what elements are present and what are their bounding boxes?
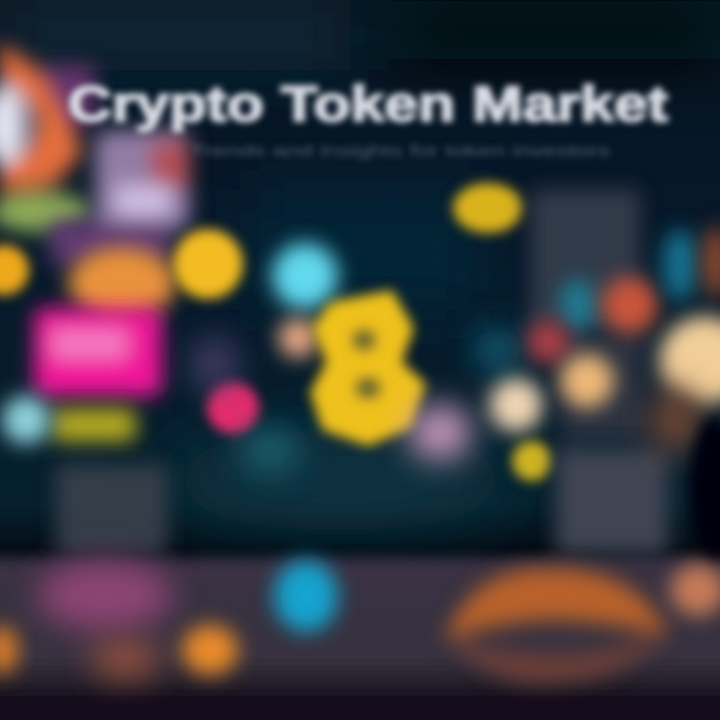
dark shadow [690,418,720,562]
icon: peach coin [278,318,318,358]
soft orange glow [91,640,159,680]
right tower [526,190,668,554]
peach coin [560,354,614,408]
left tower of coins [34,130,190,554]
grey pedestal [56,464,168,554]
cyan reflection [274,560,338,632]
orange coin stack [68,247,176,319]
floor reflections [0,559,720,683]
icon: orange ring logo [0,42,95,232]
tower lower column [560,330,645,440]
pink reflection [37,559,173,631]
orange glow [182,625,238,675]
icon: pink and teal cluster [240,328,522,472]
subtitle: Trends and insights for token investors [190,143,610,160]
right floor glow [670,564,720,616]
purple haze [191,335,239,395]
icon: yellow bitcoin symbol [310,290,426,446]
red coin [526,320,570,364]
red orange coin [602,277,658,333]
tower top [50,130,190,265]
icon: gold coin right of tower [173,229,243,299]
background glow [0,0,720,530]
brown coin [702,226,720,298]
title: Crypto Token Market [68,76,668,132]
tower base [556,448,668,554]
brown fringe [649,386,701,454]
floor band [0,558,720,720]
cream glow [659,316,720,404]
icon: yellow badge [453,183,523,233]
right edge shapes [649,226,720,562]
left orange glow [0,626,18,674]
icon: pale blue coin [2,396,50,444]
icon: magenta coin [207,382,259,434]
teal coin [560,279,596,331]
icon: pale glowing coin [489,378,543,432]
icon: cyan coin [272,243,338,309]
pink block [34,308,162,396]
yellow base label [52,408,136,442]
tower upper column [530,190,640,330]
brown orange ring reflection [445,568,668,683]
icon: small yellow coin [512,441,552,481]
blue coin [662,229,698,301]
icon: gold coin left edge [0,245,29,295]
